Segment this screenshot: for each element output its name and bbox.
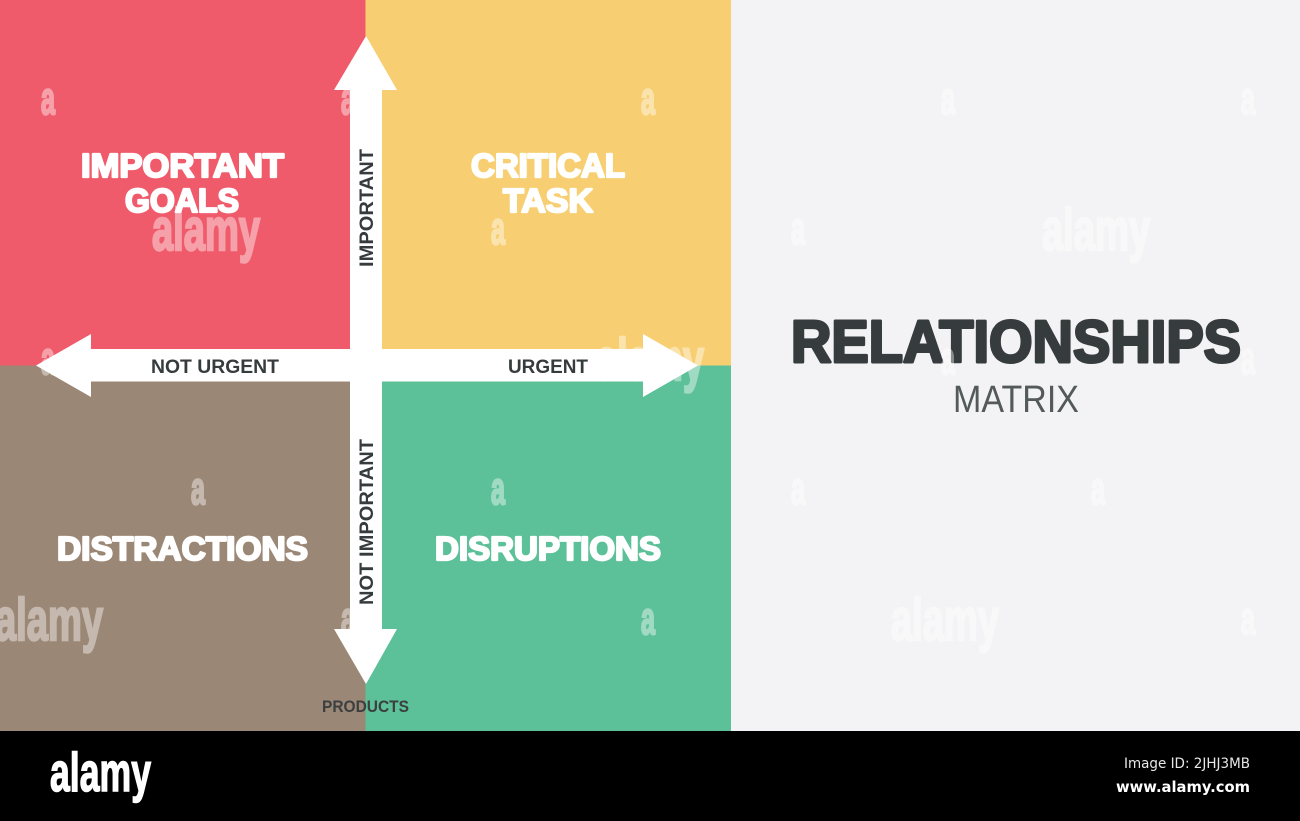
watermarks: a (491, 463, 506, 514)
watermarks: alamy (152, 197, 260, 263)
watermarks: a (941, 333, 956, 384)
watermarks: alamy (1042, 197, 1150, 263)
watermarks: a (1241, 333, 1256, 384)
panel: important goals quadrant (0, 0, 366, 366)
watermarks: a (191, 463, 206, 514)
heading: distractions: DISTRACTIONS (57, 530, 308, 567)
panel: title background (730, 0, 1300, 731)
watermarks: a (641, 73, 656, 124)
heading: important goals: IMPORTANT (81, 147, 284, 184)
title: relationships: RELATIONSHIPS (791, 309, 1241, 375)
label: not important axis: NOT IMPORTANT (357, 439, 378, 605)
heading: important goals (81, 147, 284, 219)
footer text: image id: Image ID: 2JHJ3MB (1124, 756, 1250, 772)
watermarks: a (1241, 73, 1256, 124)
watermarks: a (791, 463, 806, 514)
watermarks: alamy (891, 587, 999, 653)
arrow: horizontal axis, not urgent to urgent (36, 334, 698, 397)
label: important axis: IMPORTANT (357, 149, 378, 267)
watermarks: a (341, 593, 356, 644)
heading: critical task: TASK (503, 182, 593, 219)
panel: distractions quadrant (0, 366, 366, 731)
watermarks: a (1091, 463, 1106, 514)
label: not urgent axis: NOT URGENT (151, 357, 279, 378)
subtitle: matrix: MATRIX (953, 379, 1079, 421)
watermarks: a (641, 593, 656, 644)
footer bar (0, 731, 1300, 821)
panel: critical task quadrant (366, 0, 731, 366)
heading: critical task (471, 147, 625, 219)
footer logo: alamy: alamy (50, 741, 151, 803)
heading: critical task: CRITICAL (471, 147, 625, 184)
heading: disruptions: DISRUPTIONS (435, 530, 661, 567)
footer text: website: www.alamy.com (1116, 778, 1250, 796)
watermarks: alamy (0, 587, 103, 653)
watermarks: a (341, 73, 356, 124)
watermarks: a (41, 73, 56, 124)
watermarks: a (941, 73, 956, 124)
watermarks: a (41, 333, 56, 384)
watermarks: a (1241, 593, 1256, 644)
watermarks (0, 73, 1256, 653)
label: products: PRODUCTS (322, 698, 409, 716)
arrow: vertical axis, important to not important (334, 36, 397, 684)
watermarks: a (791, 203, 806, 254)
watermarks: alamy (596, 327, 704, 393)
watermarks: a (491, 203, 506, 254)
panel: disruptions quadrant (366, 366, 731, 731)
label: urgent axis: URGENT (508, 357, 588, 378)
heading: important goals: GOALS (125, 182, 239, 219)
